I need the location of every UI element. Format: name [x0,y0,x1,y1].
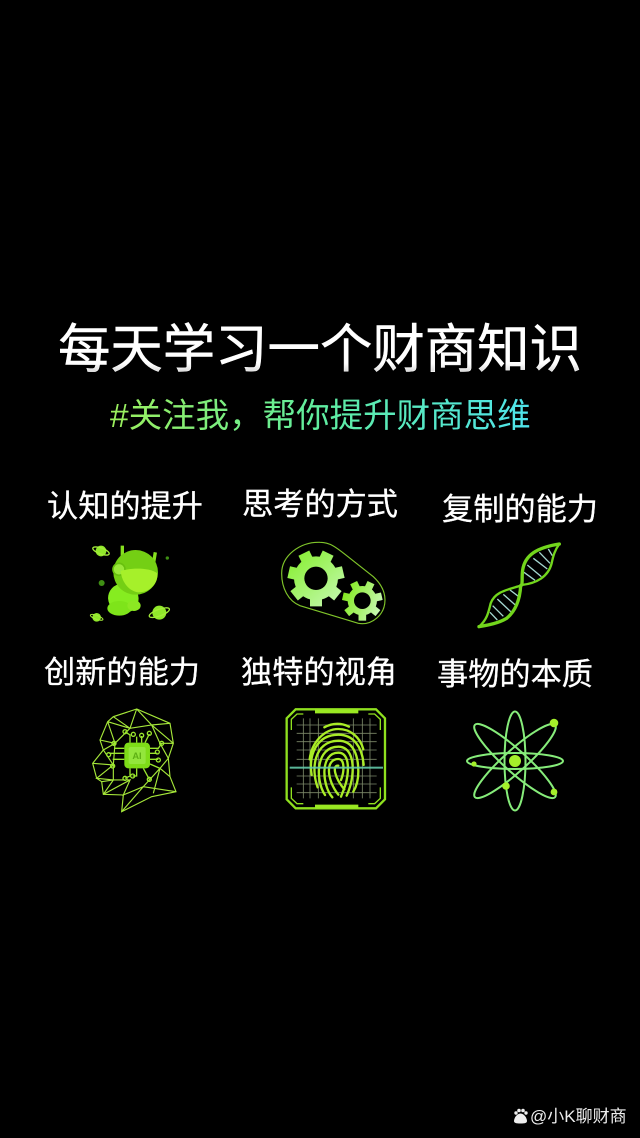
watermark [514,1107,627,1126]
label: 创新的能力 [44,655,200,690]
icon: AI head: AI [132,751,142,761]
title: 每天学习一个财商知识 [58,321,582,379]
icon: gears [282,542,387,625]
label: 思考的方式 [242,487,398,522]
panel: 创新的能力 [44,655,200,812]
icon: paw logo [514,1109,528,1124]
panel: 复制的能力 [442,492,598,627]
label: 独特的视角 [241,655,397,690]
icon: atom [467,712,563,810]
icon: astronaut [90,545,170,622]
icon: AI head [93,709,176,812]
icon: fingerprint scanner [287,709,385,808]
label: 认知的提升 [47,489,203,524]
panel: 事物的本质 [437,657,593,810]
label: 复制的能力 [442,492,598,527]
label: 事物的本质 [437,657,593,692]
panel: 认知的提升 [47,489,203,622]
subtitle: #关注我，帮你提升财商思维 [110,398,531,435]
panel: 思考的方式 [242,487,398,625]
panel: 独特的视角 [241,655,397,808]
icon: dna helix [479,544,559,627]
author handle: @小K聊财商 [530,1107,627,1126]
